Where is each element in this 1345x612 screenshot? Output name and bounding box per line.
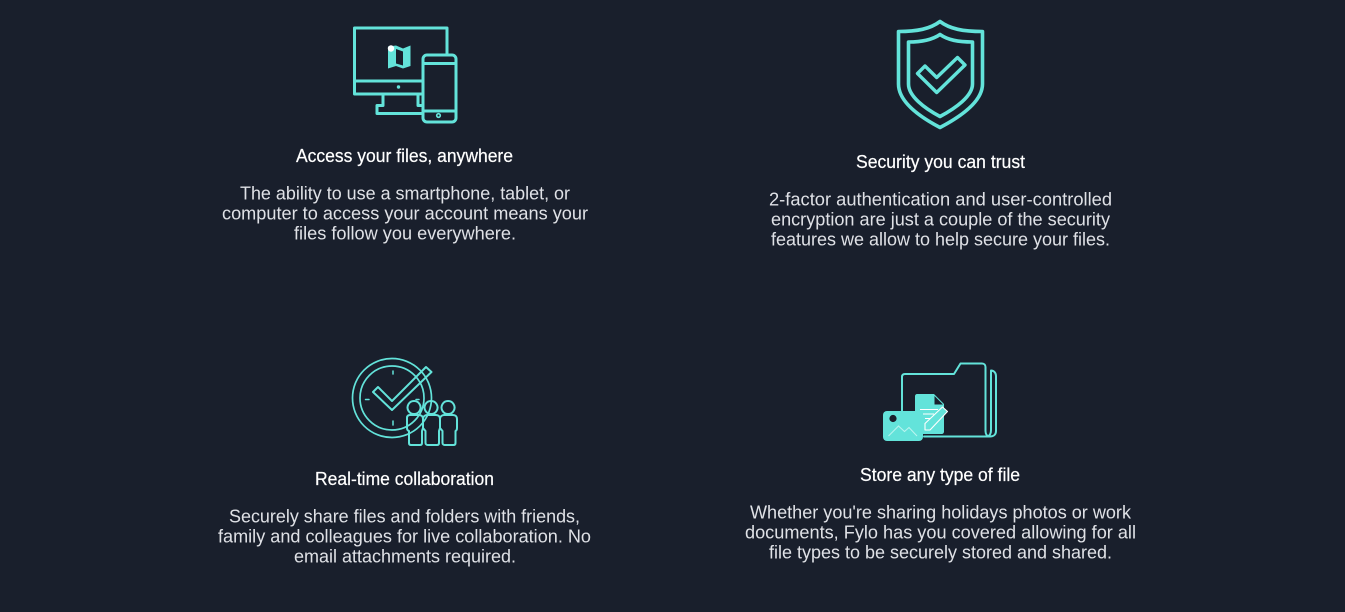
text block: encryption are just a couple of the security — [771, 210, 1110, 230]
text block: Securely share files and folders with friends, — [229, 506, 580, 526]
text block — [222, 184, 588, 244]
icon: monitor and phone with map — [354, 28, 456, 122]
icon: shield with check — [898, 22, 982, 128]
panel: access your files — [222, 28, 588, 244]
text block: files follow you everywhere. — [294, 224, 516, 244]
text block: documents, Fylo has you covered allowing for all — [745, 522, 1136, 542]
text block: computer to access your account means your — [222, 204, 588, 224]
text block — [218, 506, 591, 566]
panel: store any file — [745, 364, 1136, 562]
text block — [769, 190, 1112, 250]
text block: features we allow to help secure your files. — [771, 230, 1110, 250]
text block — [745, 502, 1136, 562]
icon: clock, check and people — [352, 358, 457, 445]
text block: email attachments required. — [294, 546, 516, 566]
icon: folder with image and document — [883, 364, 996, 441]
text block: 2-factor authentication and user-controlled — [769, 190, 1112, 210]
heading: Security you can trust — [856, 152, 1025, 172]
heading: Store any type of file — [860, 465, 1020, 485]
panel: collaboration — [218, 358, 591, 566]
heading: Access your files, anywhere — [296, 146, 513, 166]
heading: Real-time collaboration — [315, 469, 494, 489]
text block: family and colleagues for live collaboration. No — [218, 526, 591, 546]
text block: The ability to use a smartphone, tablet, or — [240, 184, 570, 204]
text block: file types to be securely stored and shared. — [769, 542, 1112, 562]
text block: Whether you're sharing holidays photos or work — [750, 502, 1132, 522]
panel: security — [769, 22, 1112, 250]
